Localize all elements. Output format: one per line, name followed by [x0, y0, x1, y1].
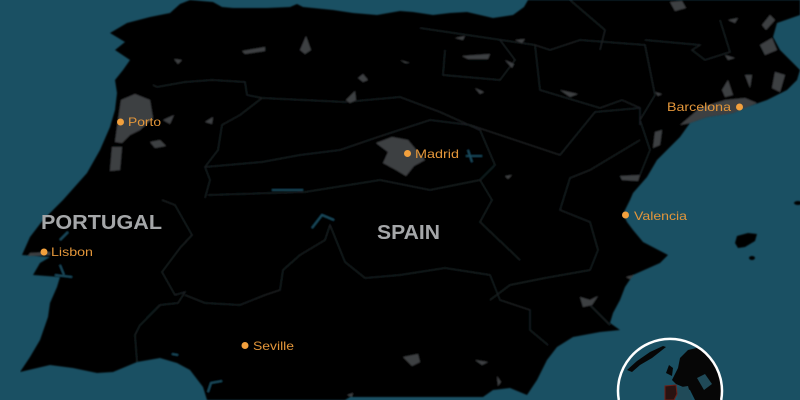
Madrid urban area — [376, 137, 425, 176]
Porto urban area — [115, 94, 153, 143]
country label: Portugal: PORTUGAL — [41, 212, 162, 234]
Scandinavia and Europe on globe — [672, 348, 721, 400]
regional boundaries — [135, 0, 730, 362]
city marker: Seville — [242, 339, 294, 353]
city marker: Seville: Seville — [253, 339, 294, 353]
city marker: Lisbon: Lisbon — [51, 245, 93, 259]
globe outline — [618, 339, 722, 400]
city marker: Valencia — [622, 209, 687, 223]
city marker: Madrid: Madrid — [415, 147, 459, 161]
city marker: Madrid — [404, 147, 459, 161]
islands: Balearics — [735, 201, 800, 260]
inset globe locator — [618, 339, 725, 400]
city marker: Porto: Porto — [128, 115, 161, 129]
city marker: Porto — [117, 115, 161, 129]
southern urban areas — [580, 296, 598, 307]
Barcelona urban area and Catalan coast — [680, 98, 757, 125]
globe sea — [618, 339, 722, 400]
British Isles on globe — [666, 365, 673, 376]
Greenland on globe — [627, 346, 666, 372]
city marker: Lisbon — [40, 245, 93, 259]
city marker: Valencia: Valencia — [634, 209, 687, 223]
highlighted Iberia on globe — [665, 385, 677, 400]
inland seas on globe — [697, 374, 712, 390]
reservoirs and rivers — [55, 150, 482, 392]
country label: Spain: SPAIN — [377, 222, 440, 244]
city marker: Barcelona: Barcelona — [667, 100, 731, 114]
